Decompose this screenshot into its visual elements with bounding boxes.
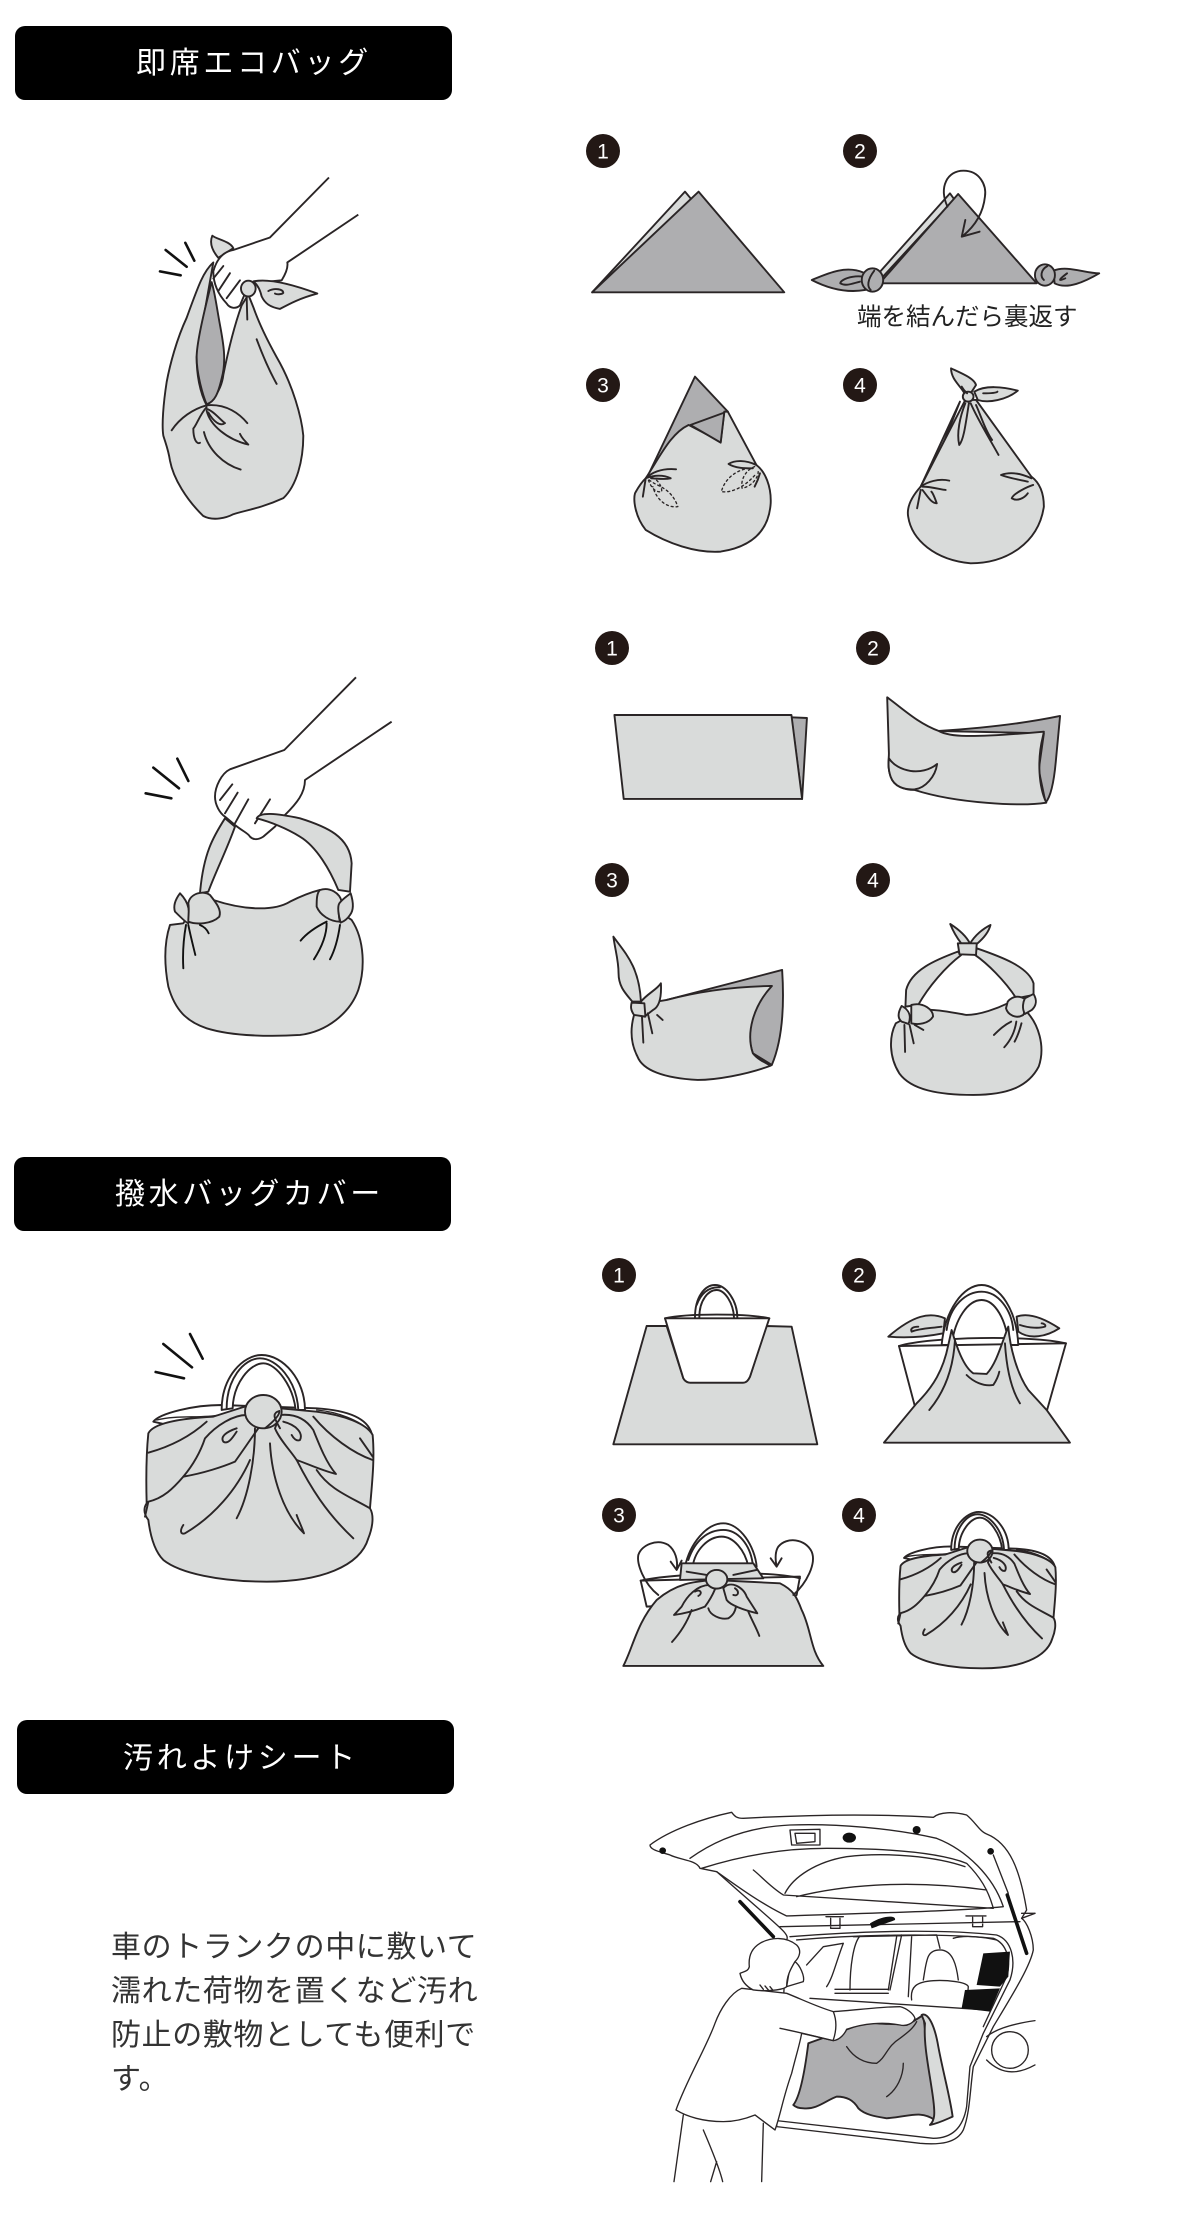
tall tail [613, 937, 641, 1002]
right knot [317, 889, 342, 922]
badge 2 [856, 631, 890, 665]
curl [888, 758, 937, 789]
triangle [880, 194, 1037, 283]
short tail [641, 983, 661, 1017]
black seat [977, 1952, 1010, 1987]
knot [631, 1003, 645, 1017]
back layer [791, 717, 807, 799]
right tail [1054, 269, 1099, 286]
bag body [908, 400, 1044, 563]
left tail [888, 1315, 945, 1337]
dark sliver [921, 402, 960, 487]
folds [672, 1588, 759, 1642]
badge 2 [842, 1258, 876, 1292]
folds [643, 461, 760, 497]
front layer [614, 715, 802, 799]
finger lines [220, 784, 270, 823]
tailgate details [690, 1825, 1003, 1916]
badge 4: 4 [854, 374, 866, 398]
handles [685, 1523, 757, 1567]
badge 2 [843, 134, 877, 168]
folds [917, 403, 1033, 508]
badge 2: 2 [854, 140, 866, 164]
front layer [887, 697, 1046, 804]
text block: description: す。 [111, 2063, 169, 2096]
bolts and struts [659, 1847, 666, 1854]
badge 4 [843, 368, 877, 402]
badge 2: 2 [853, 1264, 865, 1288]
emphasis lines [160, 243, 194, 275]
turn-over arrow [944, 171, 985, 237]
hand [215, 677, 392, 839]
text block: description: 濡れた荷物を置くなど汚れ [111, 1975, 478, 2008]
text block: description [111, 1931, 478, 2096]
fold triangle [690, 413, 724, 443]
step 3: tying the cloth [623, 1523, 823, 1666]
right knot [1006, 997, 1028, 1017]
badge 4 [856, 863, 890, 897]
right tail [1017, 1315, 1059, 1336]
emphasis lines [156, 1334, 203, 1378]
top knot [958, 943, 977, 955]
mount details [870, 1917, 895, 1928]
step 4: finished bag cover [898, 1512, 1056, 1668]
badge 1 [595, 631, 629, 665]
badge 3: 3 [613, 1504, 625, 1528]
roof rail [780, 1913, 1035, 1928]
badge 3 [586, 368, 620, 402]
badge 3: 3 [597, 374, 609, 398]
bag fold lines [172, 296, 277, 470]
hair [740, 1939, 800, 1991]
tails [951, 368, 976, 395]
sack [631, 986, 772, 1080]
right handle [257, 814, 352, 892]
step 3: gathered sack [634, 377, 771, 552]
left knot [862, 268, 883, 292]
wheel [992, 2032, 1028, 2068]
step 2: cloth tied over handles [884, 1285, 1070, 1443]
handle right [975, 948, 1034, 998]
illustration: bag covered with cloth [144, 1334, 373, 1582]
step 2: one corner knotted [887, 697, 1060, 804]
text block: description: 車のトランクの中に敷いて [111, 1931, 477, 1964]
sheet light edge [922, 2015, 953, 2125]
knot [241, 281, 256, 296]
illustration: eco bag held in hand [160, 177, 358, 519]
step 2: corners knotted [812, 171, 1099, 292]
band [680, 1563, 763, 1580]
badge 1: 1 [597, 140, 609, 164]
sack [634, 412, 771, 552]
heading: 汚れよけシート: 汚れよけシート [123, 1742, 359, 1775]
folds [929, 1340, 1020, 1410]
cloth [613, 1326, 817, 1444]
badge 2: 2 [867, 638, 879, 660]
right knot [1035, 264, 1055, 286]
badge 3 [595, 863, 629, 897]
tails [674, 1585, 715, 1615]
window frame [777, 1931, 1013, 2138]
text block: description: 防止の敷物としても便利で [111, 2019, 476, 2052]
left tail [812, 270, 865, 291]
left knot [911, 1004, 933, 1024]
heading: 即席エコバッグ: 即席エコバッグ [136, 47, 372, 80]
caption: step 2: 端を結んだら裏返す [857, 303, 1078, 331]
handle left [905, 952, 961, 1007]
bag [899, 1338, 1066, 1412]
knot [706, 1570, 727, 1589]
cuff [780, 2012, 836, 2041]
top tails [950, 924, 970, 943]
badge 3: 3 [606, 870, 618, 892]
bag body [163, 262, 303, 519]
left knot [174, 893, 189, 923]
badge 4: 4 [867, 870, 879, 892]
back layer [939, 716, 1060, 803]
back layer [667, 970, 783, 1065]
badge 1 [602, 1258, 636, 1292]
sheet inner edge [793, 2015, 935, 2120]
badge 4 [842, 1498, 876, 1532]
badge 1: 1 [613, 1264, 625, 1288]
back layer [592, 192, 691, 292]
bag inner shade [197, 282, 224, 404]
sheet creases [847, 2022, 917, 2097]
illustration: person laying sheet in car trunk [650, 1812, 1035, 2182]
bag body [165, 890, 363, 1036]
body [891, 1003, 1041, 1095]
handles [695, 1285, 737, 1317]
step 1: folded triangle [592, 192, 784, 292]
step 3: gathered with tail [613, 937, 783, 1080]
left arrow [638, 1542, 682, 1595]
cloth [623, 1580, 823, 1666]
knot [963, 392, 974, 402]
heading: 撥水バッグカバー [14, 1157, 451, 1231]
step 4: finished handbag [891, 924, 1041, 1095]
badge 3 [602, 1498, 636, 1532]
folds [904, 1022, 1021, 1052]
ear of the bag [211, 236, 233, 258]
heading: 汚れよけシート [17, 1720, 454, 1794]
dotted tails [647, 467, 758, 507]
badge 1 [586, 134, 620, 168]
legs [674, 2115, 763, 2182]
cloth [884, 1327, 1070, 1443]
hand [213, 177, 358, 308]
covered bag [144, 1355, 373, 1582]
person's body [676, 1988, 915, 2130]
face [787, 1962, 804, 1987]
badge 4: 4 [853, 1504, 865, 1528]
right arrow [771, 1540, 813, 1595]
left handle [200, 818, 235, 893]
interior seats [807, 1935, 997, 2010]
back flap [647, 377, 728, 477]
heading: 撥水バッグカバー: 撥水バッグカバー [115, 1178, 384, 1211]
finger lines [213, 266, 240, 298]
step 1: folded rectangle [614, 715, 807, 799]
sliver [877, 193, 954, 278]
emphasis lines [146, 759, 188, 798]
fold lines [183, 922, 340, 968]
bag [641, 1577, 800, 1607]
badge 1: 1 [606, 638, 618, 660]
step 4: tied bag [908, 368, 1044, 563]
bag tail [253, 280, 317, 309]
heading: 即席エコバッグ [15, 26, 452, 100]
bag [665, 1315, 769, 1383]
step 1: bag on cloth [613, 1285, 817, 1444]
handles [942, 1285, 1018, 1345]
illustration: knotted handbag held in hand [146, 677, 392, 1036]
folds [642, 1013, 663, 1043]
front layer [592, 192, 784, 292]
tailgate and car body [650, 1812, 1033, 2144]
